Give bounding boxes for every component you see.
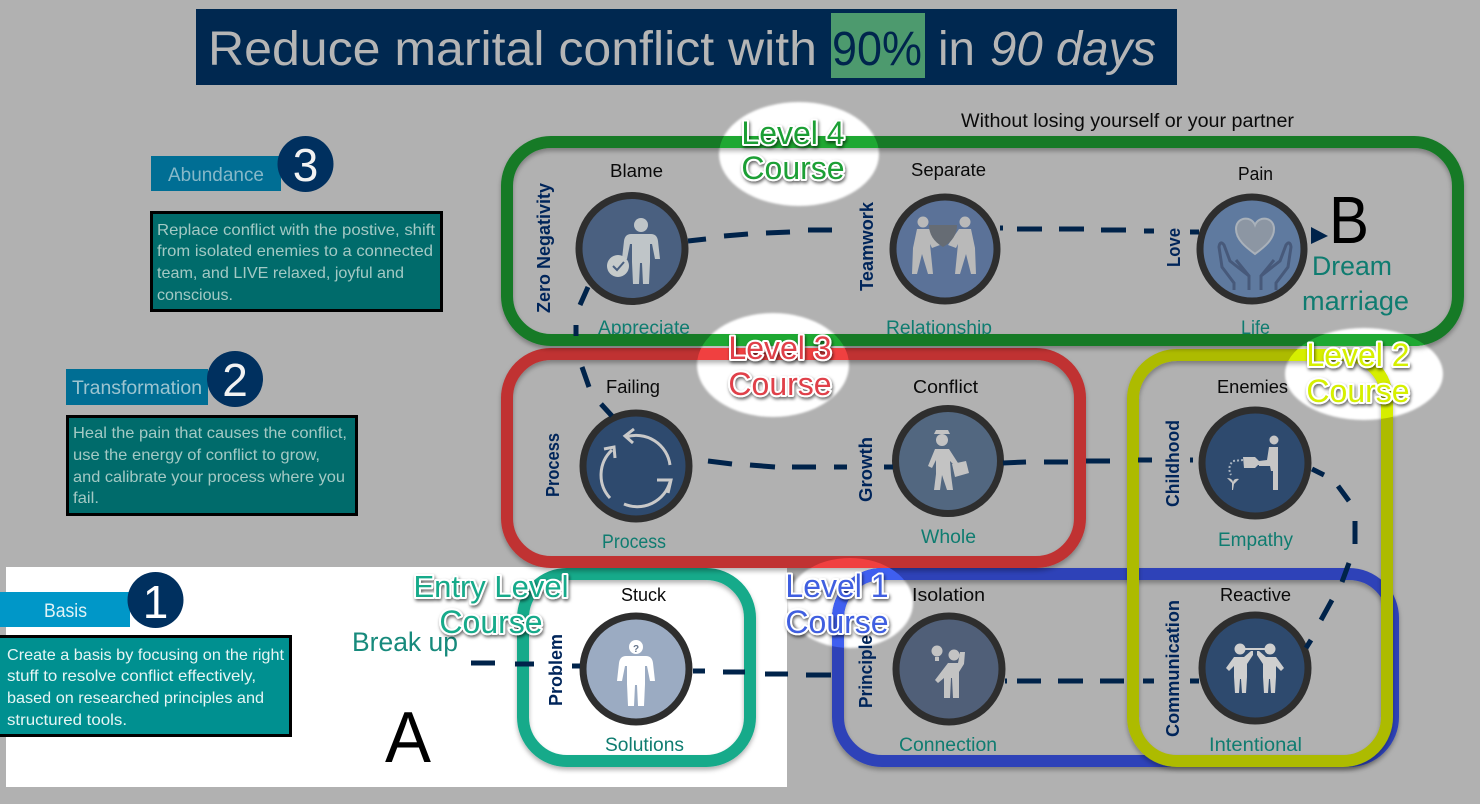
node: Isolation / Connection: Isolation [912,585,985,605]
panel: step 2 transformation: fail. [73,490,99,507]
node: Conflict / Whole: Whole [921,527,976,548]
node: Stuck / Solutions: Stuck [621,585,667,605]
label: level 3 course [728,330,832,402]
point A label: break up: Break up [352,627,458,657]
label: entry level course: Entry Level [413,569,569,604]
node: Failing / Process: Failing [606,377,660,397]
arrow to point B [1311,227,1328,244]
node: Reactive / Intentional: Intentional [1209,735,1302,756]
brightened frame sections inside ellipses [697,136,1425,648]
label: level 1 course: Level 1 [785,568,889,604]
node: Isolation / Connection [856,585,1002,756]
node: Stuck / Solutions: ? [633,644,639,655]
label: level 3 course: Course [728,366,832,402]
label: level 4 course: Course [741,150,845,186]
course frame: level 2 [1133,355,1387,761]
node: Separate / Relationship [857,160,997,339]
node: Blame / Appreciate: Blame [610,161,663,181]
course frame: level 1 [838,574,1393,761]
point B label: dream marriage: marriage [1302,286,1409,316]
panel: step 1 basis: Basis [44,601,87,622]
panel: step 3 abundance [151,136,442,310]
title banner [196,9,1177,85]
panel: step 3 abundance: from isolated enemies to a connected [157,243,433,260]
panel: step 2 transformation: and calibrate your process where you [73,469,345,486]
node: Pain / Life: Life [1241,318,1270,339]
panel: step 1 basis: structured tools. [7,712,127,729]
label: level 2 course: Course [1306,373,1410,409]
panel: step 3 abundance: 3 [293,139,318,191]
course frame: level 4 [507,142,1458,340]
node: Isolation / Connection: Principle [856,635,876,708]
title banner: Reduce marital conflict with [208,23,817,76]
course frame: entry level [523,574,750,761]
point B: B [1329,183,1369,258]
node: Conflict / Whole: Conflict [913,377,978,397]
node: Conflict / Whole: Growth [856,437,876,502]
label: level 3 course: Level 3 [728,330,832,366]
node: Failing / Process: Process [543,433,563,497]
label: entry level course [413,569,569,640]
node: Pain / Life: Pain [1238,164,1273,184]
panel: step 1 basis: stuff to resolve conflict effectively, [7,668,256,685]
point B label: dream marriage [1302,251,1409,316]
course highlight ellipses [697,102,1443,648]
label: level 4 course: Level 4 [741,115,845,151]
subtitle: Without losing yourself or your partner [961,111,1295,132]
point B label: dream marriage: Dream [1312,251,1392,281]
node: Pain / Life: Love [1164,228,1184,267]
node: Stuck / Solutions: Problem [546,634,566,706]
node: Separate / Relationship: Relationship [886,318,992,339]
panel: step 2 transformation: use the energy of conflict to grow, [73,447,320,464]
node: Failing / Process [543,377,689,553]
label: level 4 course [741,115,845,186]
node: Reactive / Intentional: Communication [1163,600,1183,737]
node: Isolation / Connection: Connection [899,735,997,756]
node: Stuck / Solutions: Solutions [605,735,684,756]
white highlighted starting area [6,567,787,787]
node: Blame / Appreciate [534,161,690,339]
node: Stuck / Solutions [546,585,689,756]
label: entry level course: Course [439,604,543,640]
panel: step 2 transformation: 2 [222,354,248,406]
label: level 1 course: Course [785,604,889,640]
node: Separate / Relationship: Separate [911,160,986,180]
panel: step 3 abundance: Replace conflict with the postive, shift [157,222,436,239]
point A: A [385,698,431,778]
node: Reactive / Intentional: Reactive [1220,585,1291,605]
node: Separate / Relationship: Teamwork [857,201,877,291]
node: Enemies / Empathy [1163,377,1308,551]
label: level 2 course: Level 2 [1306,337,1410,373]
panel: step 2 transformation: Heal the pain that causes the conflict, [73,425,347,442]
panel: step 3 abundance: Abundance [168,165,264,186]
node: Blame / Appreciate: Zero Negativity [534,183,554,313]
panel: step 1 basis [0,572,290,736]
node: Failing / Process: Process [602,532,666,553]
title banner: 90% [832,23,922,76]
course frame: level 3 [507,354,1080,562]
label: level 2 course [1306,337,1410,409]
panel: step 1 basis: based on researched principles and [7,690,264,707]
node: Pain / Life [1164,164,1304,339]
label: level 1 course [785,568,889,640]
node: Blame / Appreciate: Appreciate [598,318,690,339]
panel: step 3 abundance: team, and LIVE relaxed, joyful and [157,265,404,282]
title banner: 90 days [990,23,1156,76]
panel: step 2 transformation [66,351,356,514]
panel: step 1 basis: Create a basis by focusing on the right [7,647,285,664]
panel: step 2 transformation: Transformation [72,378,202,399]
node: Enemies / Empathy: Empathy [1218,530,1293,551]
panel: step 3 abundance: conscious. [157,287,233,304]
dashed journey path [471,228,1355,681]
node: Enemies / Empathy: Childhood [1163,420,1183,507]
node: Enemies / Empathy: Enemies [1217,377,1288,397]
panel: step 1 basis: 1 [143,576,168,628]
node: Reactive / Intentional [1163,585,1308,756]
node: Conflict / Whole [856,377,1000,548]
title banner: in [938,23,975,76]
